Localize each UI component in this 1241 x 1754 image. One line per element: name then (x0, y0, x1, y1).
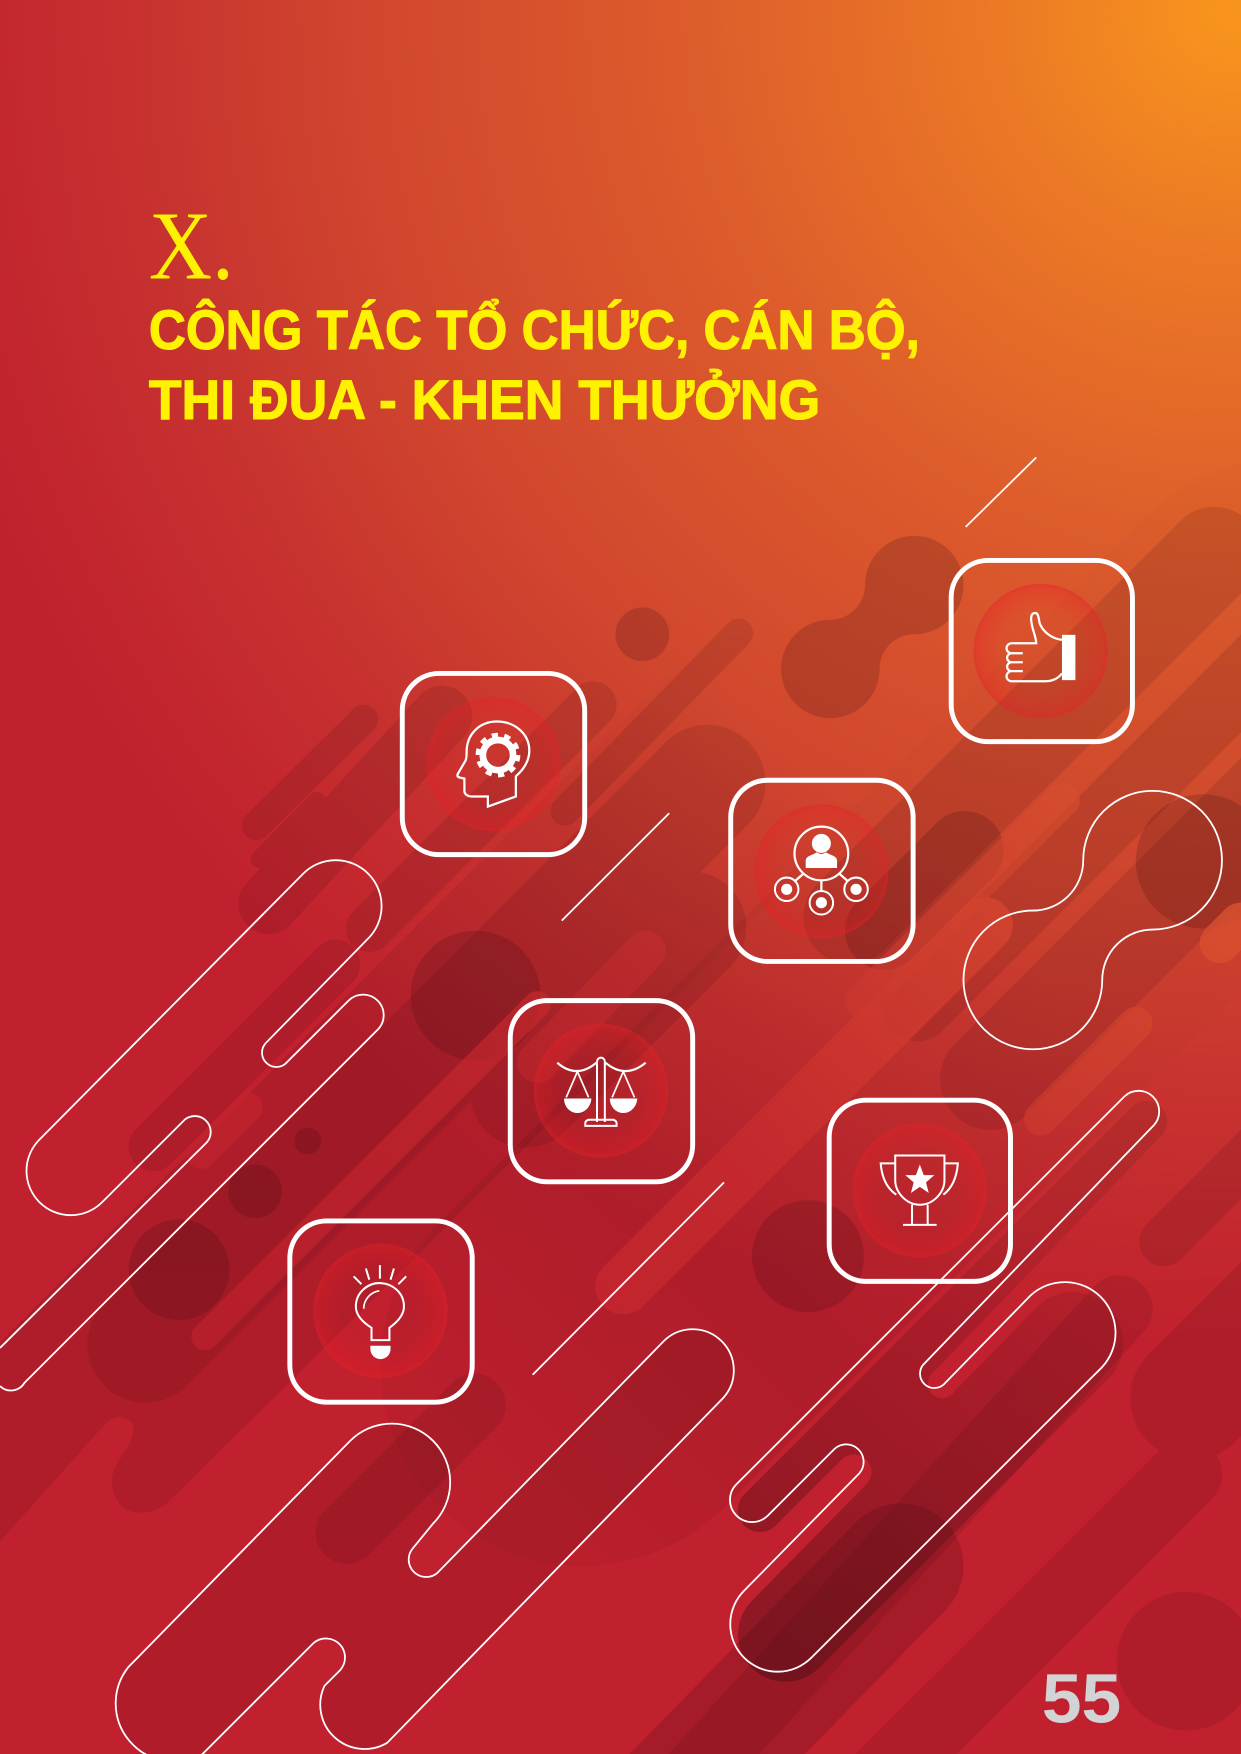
white outline capsules (0, 458, 1222, 1754)
central dark diagonal region (0, 548, 1241, 1541)
page number: 55 (1042, 1660, 1121, 1738)
heading: THI ĐUA - KHEN THƯỞNG (149, 368, 820, 431)
icon card: light bulb (290, 1221, 472, 1402)
heading: CÔNG TÁC TỔ CHỨC, CÁN BỘ, (149, 298, 920, 361)
lighter diagonal bars (201, 800, 1240, 1337)
icon card: head with gear (402, 673, 585, 855)
icon card: scales (510, 1001, 693, 1182)
icon card: thumbs up (951, 560, 1132, 742)
section number: X. (149, 193, 234, 301)
outlined shape fills (116, 1101, 1167, 1754)
soft dark diagonal bands (145, 554, 1241, 1754)
icon card: person network (731, 780, 913, 961)
heading (149, 298, 920, 431)
icon card: trophy (829, 1100, 1010, 1281)
darker blobs (129, 536, 1241, 1754)
